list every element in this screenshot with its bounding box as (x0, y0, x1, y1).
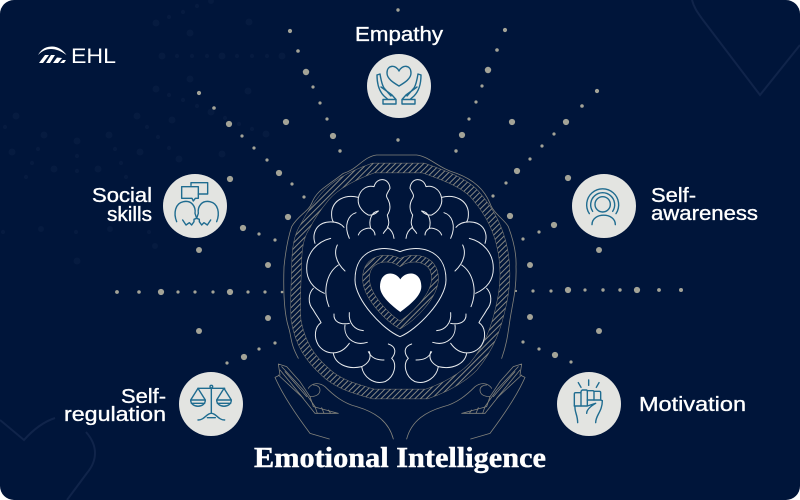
node: Self-awareness: awareness (651, 203, 758, 225)
title: Emotional Intelligence (254, 443, 546, 474)
node: Empathy (355, 24, 443, 118)
radiating dots (115, 8, 683, 365)
heart outline (355, 249, 446, 337)
left brain hemisphere (307, 180, 395, 382)
logo: EHL: EHL (71, 44, 116, 68)
logo: EHL (38, 44, 116, 68)
node: Motivation (557, 372, 746, 436)
outer brain contour (284, 155, 516, 358)
decorative heart: top right (692, 0, 800, 95)
node: Self-regulation (64, 372, 243, 436)
node: Self-awareness: Self- (651, 185, 696, 207)
hatched brain band (296, 168, 505, 394)
right brain hemisphere (405, 180, 493, 382)
decorative heart: bottom left (0, 418, 95, 500)
node: Self-regulation: regulation (64, 404, 166, 426)
node: Social skills (92, 174, 227, 238)
node: Social skills: Social (92, 185, 152, 207)
left hand (275, 364, 393, 439)
node: Motivation: Motivation (639, 394, 746, 416)
right hand (407, 364, 525, 439)
faint background dots (1, 0, 286, 264)
node: Self-regulation: Self- (121, 386, 166, 408)
node: Empathy: Empathy (355, 24, 443, 46)
node: Self-awareness (572, 174, 758, 238)
white centre heart (380, 274, 421, 312)
hatched heart band (366, 259, 435, 325)
brain, heart and hands illustration (275, 155, 525, 439)
node: Social skills: skills (107, 204, 152, 226)
